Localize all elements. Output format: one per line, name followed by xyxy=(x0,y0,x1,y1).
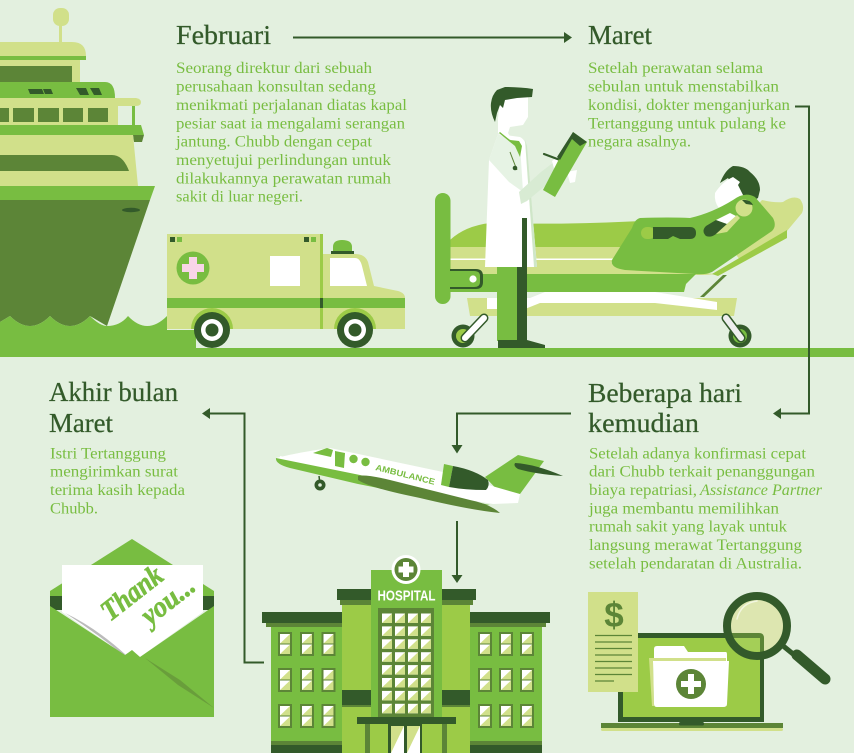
hospital sign text: HOSPITAL xyxy=(378,588,436,604)
bed headboard xyxy=(435,193,483,304)
arrow: hospital to Akhir bulan Maret xyxy=(202,408,264,662)
heading: Beberapa hari kemudian xyxy=(588,378,742,438)
heading: Februari: Februari xyxy=(176,20,271,50)
illustration: hospital xyxy=(262,555,550,753)
text block: Februari: pesiar saat ia mengalami serangan xyxy=(176,115,405,132)
heading: Akhir bulan Maret: Akhir bulan xyxy=(49,377,178,407)
text block: Beberapa hari kemudian: Assistance Partner xyxy=(699,482,823,499)
clipboard xyxy=(543,132,587,197)
text block: Februari: perusahaan konsultan sedang xyxy=(176,78,376,96)
text: AMBULANCE: AMBULANCE xyxy=(375,462,436,487)
text block: Maret: kondisi, dokter menganjurkan xyxy=(588,97,790,114)
hospital entrance xyxy=(357,717,456,753)
icon: medical folder xyxy=(649,646,729,707)
illustration: ambulance airplane xyxy=(276,448,563,513)
text block: Akhir bulan Maret xyxy=(50,445,185,517)
arrow: to airplane xyxy=(452,414,571,454)
invoice with dollar sign xyxy=(588,592,638,692)
text block: Beberapa hari kemudian: biaya repatriasi, xyxy=(589,482,697,499)
text block: Februari: menikmati perjalanan diatas kapal xyxy=(176,97,407,114)
bed casters xyxy=(452,318,752,348)
invoice with dollar sign: $ xyxy=(604,596,624,635)
hospital wing windows xyxy=(278,632,534,728)
hospital tower windows xyxy=(382,614,431,713)
illustration: cruise ship xyxy=(0,8,155,326)
text block: Akhir bulan Maret: mengirimkan surat xyxy=(50,464,179,481)
illustration: doctor with clipboard xyxy=(485,87,587,348)
heading: Beberapa hari kemudian: Beberapa hari xyxy=(588,378,742,408)
text block: Februari: dilakukannya perawatan rumah xyxy=(176,170,391,187)
text block: Beberapa hari kemudian: rumah sakit yang layak untuk xyxy=(589,519,787,536)
text block: Beberapa hari kemudian xyxy=(588,445,823,572)
heading: Akhir bulan Maret xyxy=(49,377,178,438)
text block: Februari: jantung. Chubb dengan cepat xyxy=(175,134,373,151)
text block: Februari: Seorang direktur dari sebuah xyxy=(176,60,372,77)
text block: Maret: sebulan untuk menstabilkan xyxy=(588,78,779,96)
illustration: hospital bed with patient xyxy=(435,166,803,348)
text block: Maret: negara asalnya. xyxy=(588,134,691,151)
icon: hospital cross xyxy=(392,555,420,584)
illustration: thank you envelope xyxy=(50,539,214,717)
icon: magnifying glass xyxy=(723,592,830,684)
text: Thank you: Thank xyxy=(95,559,170,628)
text block: Beberapa hari kemudian: dari Chubb terkait penanggungan xyxy=(589,464,815,481)
arrow: Februari to Maret xyxy=(293,32,572,43)
text block: Beberapa hari kemudian: juga membantu memilihkan xyxy=(588,500,779,517)
text block: Beberapa hari kemudian: Setelah adanya konfirmasi cepat xyxy=(589,445,807,462)
arrow: Maret to Beberapa hari kemudian xyxy=(773,106,809,419)
text block: Akhir bulan Maret: Istri Tertanggung xyxy=(50,445,166,462)
heading: Beberapa hari kemudian: kemudian xyxy=(588,408,700,438)
laptop xyxy=(601,633,783,731)
text block: Februari: menyetujui perlindungan untuk xyxy=(176,152,391,169)
ground line xyxy=(0,348,854,357)
text block: Februari xyxy=(175,60,407,206)
illustration: ambulance xyxy=(167,234,405,348)
text block: Akhir bulan Maret: terima kasih kepada xyxy=(50,482,185,499)
illustration: water waves xyxy=(0,316,196,348)
heading: Maret: Maret xyxy=(588,20,652,50)
text block: Beberapa hari kemudian: langsung merawat Tertanggung xyxy=(589,537,802,554)
text block: Maret xyxy=(588,60,790,151)
text block: Maret: Tertanggung untuk pulang ke xyxy=(588,115,786,132)
text: Thank you: you... xyxy=(132,569,202,633)
heading: Akhir bulan Maret: Maret xyxy=(49,408,113,438)
arrow: airplane to hospital xyxy=(452,521,462,583)
text block: Maret: Setelah perawatan selama xyxy=(588,60,763,77)
text block: Beberapa hari kemudian: setelah pendaratan di Australia. xyxy=(589,556,802,572)
text: Thank you xyxy=(95,559,202,633)
text block: Akhir bulan Maret: Chubb. xyxy=(50,500,98,517)
text block: Februari: sakit di luar negeri. xyxy=(176,189,303,206)
illustration: laptop with folder, invoice and magnifier xyxy=(588,592,825,731)
